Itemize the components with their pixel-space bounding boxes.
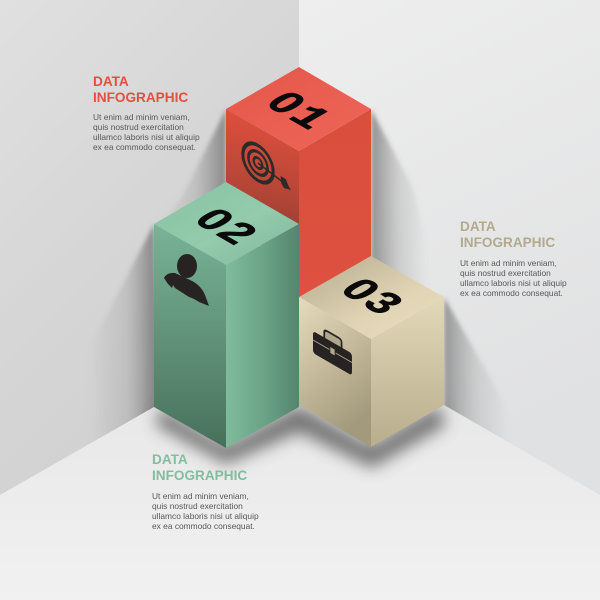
heading: red: INFOGRAPHIC <box>93 90 188 105</box>
body: red: ex ea commodo consequat. <box>93 142 196 152</box>
body: green: Ut enim ad minim veniam, <box>152 491 249 501</box>
box 02: green <box>154 182 299 448</box>
heading: beige: INFOGRAPHIC <box>460 235 555 250</box>
number 03: 03 <box>330 272 417 322</box>
body: green: quis nostrud exercitation <box>152 501 243 511</box>
icon: target <box>243 137 291 200</box>
wall shadows <box>88 109 510 450</box>
body: beige: Ut enim ad minim veniam, <box>460 258 557 268</box>
floor shadow under boxes <box>156 405 446 468</box>
body: red: Ut enim ad minim veniam, <box>93 112 190 122</box>
text block: green <box>152 452 259 531</box>
heading: green: DATA <box>152 452 188 467</box>
body: beige: quis nostrud exercitation <box>460 268 551 278</box>
number 01: 01 <box>252 85 345 139</box>
text block: beige <box>460 219 567 298</box>
body: red: ullamco laboris nisi ut aliquip <box>93 132 200 142</box>
box 03: beige <box>299 256 444 447</box>
icon: briefcase <box>313 323 352 376</box>
floor <box>0 405 600 600</box>
body: beige: ullamco laboris nisi ut aliquip <box>460 278 567 288</box>
box 01: red <box>226 67 371 298</box>
number 02: 02 <box>184 202 271 252</box>
heading: beige: DATA <box>460 219 496 234</box>
heading: red: DATA <box>93 74 129 89</box>
body: red: quis nostrud exercitation <box>93 122 184 132</box>
icon: person <box>164 254 209 306</box>
heading: green: INFOGRAPHIC <box>152 468 247 483</box>
body: beige: ex ea commodo consequat. <box>460 288 563 298</box>
body: green: ullamco laboris nisi ut aliquip <box>152 511 259 521</box>
body: green: ex ea commodo consequat. <box>152 521 255 531</box>
text block: red <box>93 74 200 152</box>
